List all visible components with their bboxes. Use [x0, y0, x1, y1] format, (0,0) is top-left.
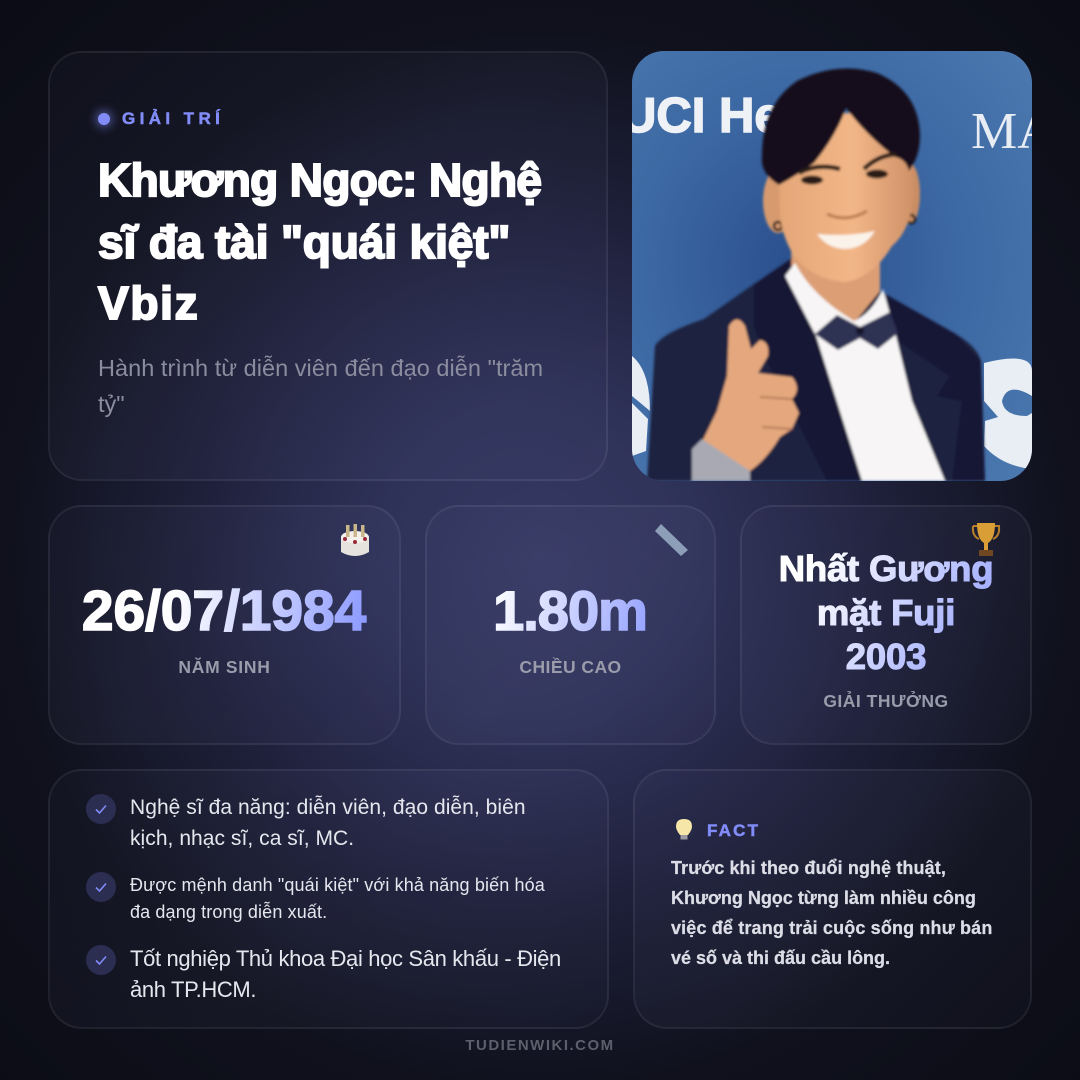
text: vé số và thi đấu cầu lông.: [671, 948, 890, 968]
value: award: [779, 548, 993, 677]
icon: glowing dot: [98, 113, 110, 125]
title: [96, 154, 542, 329]
footer: site name: TUDIENWIKI.COM: [465, 1037, 615, 1054]
smile: [817, 231, 875, 249]
ears: [763, 169, 793, 233]
label: height: CHIỀU CAO: [519, 657, 622, 677]
item text: ảnh TP.HCM.: [130, 977, 256, 1002]
value: award: Nhất Gương: [779, 548, 993, 589]
list item 3: [86, 945, 561, 1002]
item text: Tốt nghiệp Thủ khoa Đại học Sân khấu - Điện: [130, 946, 561, 971]
value: award: mặt Fuji: [817, 592, 955, 633]
text: Hành trình từ diễn viên đến đạo diễn "trăm: [98, 355, 543, 381]
item text: Nghệ sĩ đa năng: diễn viên, đạo diễn, biên: [130, 796, 526, 819]
watch: [692, 439, 750, 481]
icon: light bulb: [676, 819, 692, 840]
stat card: height: [425, 505, 716, 745]
list item 1: [86, 794, 526, 850]
text: Khương Ngọc: Nghệ: [98, 154, 541, 206]
panel: header: [48, 51, 608, 481]
item text: [130, 875, 545, 922]
fact text: [670, 858, 992, 968]
icon: ruler: [655, 524, 688, 556]
panel: fact: [633, 769, 1032, 1029]
hand: [700, 320, 799, 471]
value: award: 2003: [846, 636, 926, 677]
item text: Được mệnh danh "quái kiệt" với khả năng biến hóa: [130, 875, 545, 895]
icon: check: [86, 794, 116, 824]
icon: check: [86, 945, 116, 975]
text: Vbiz: [98, 277, 199, 329]
icon: trophy: [972, 523, 1000, 556]
value: height: 1.80m: [493, 579, 647, 642]
fact heading: FACT: [707, 821, 760, 840]
list item 2: [86, 872, 545, 922]
bow tie: [815, 312, 898, 350]
photo: portrait of Khương Ngọc: [632, 51, 1032, 481]
text: tỷ": [98, 391, 125, 417]
jacket: [647, 258, 985, 481]
hair: [762, 68, 920, 185]
stat card: birth date: [48, 505, 401, 745]
item text: [130, 946, 561, 1002]
panel: highlights: [48, 769, 609, 1029]
icon: check: [86, 872, 116, 902]
text: việc để trang trải cuộc sống như bán: [671, 918, 992, 938]
item text: kịch, nhạc sĩ, ca sĩ, MC.: [130, 827, 354, 850]
category label: GIẢI TRÍ: [122, 109, 224, 128]
item text: đa dạng trong diễn xuất.: [130, 902, 327, 922]
text: sĩ đa tài "quái kiệt": [98, 216, 510, 268]
icon: cake: [341, 524, 369, 556]
text: Trước khi theo đuổi nghệ thuật,: [671, 858, 946, 878]
shirt: [785, 263, 945, 481]
category tag: [90, 105, 224, 133]
text: Khương Ngọc từng làm nhiều công: [671, 888, 976, 908]
neck: [790, 221, 880, 323]
label: birth date: NĂM SINH: [178, 657, 271, 677]
subtitle: [98, 355, 543, 417]
brows and eyes: [799, 154, 896, 173]
face: [778, 113, 914, 282]
item text: [130, 796, 526, 850]
stat card: award: [740, 505, 1032, 745]
label: award: GIẢI THƯỞNG: [823, 691, 949, 711]
lapels: [754, 258, 862, 481]
value: birth date: 26/07/1984: [82, 579, 367, 643]
